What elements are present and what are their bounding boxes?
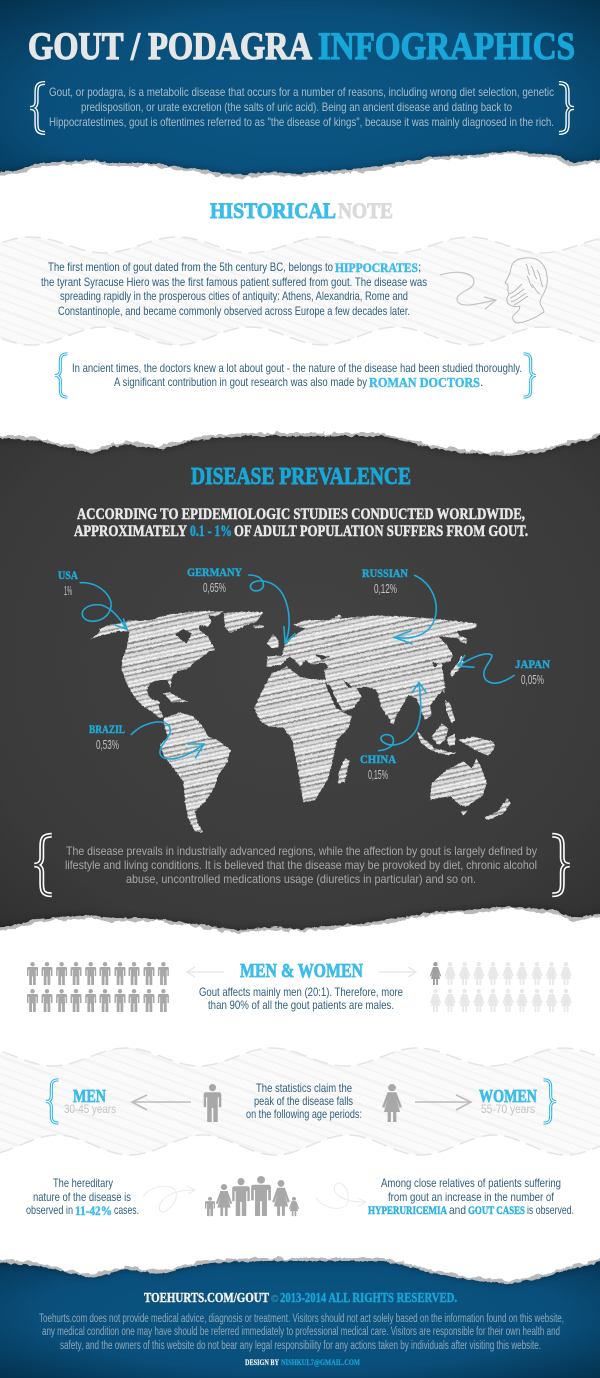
- age text: on the following age periods:: [246, 1107, 362, 1121]
- men and women text: [199, 985, 403, 1012]
- heredity left text: observed in: [26, 1203, 73, 1217]
- history text: the tyrant Syracuse Hiero was the first famous patient suffered from gout. The disease was: [41, 275, 427, 289]
- age text: The statistics claim the: [256, 1081, 352, 1095]
- history text: ;: [418, 260, 421, 274]
- disclaimer text: [39, 1313, 564, 1352]
- icon: Hippocrates bust: [505, 258, 547, 323]
- age text: peak of the disease falls: [254, 1094, 353, 1108]
- panel: hatched history band: [0, 237, 600, 345]
- torn paper: upper white sheet: [0, 154, 600, 453]
- arrow: left to men: [132, 1095, 191, 1110]
- heredity right text: from gout an increase in the number of: [388, 1190, 555, 1204]
- panel: men and women: [27, 960, 572, 1012]
- heredity left text: nature of the disease is: [33, 1190, 131, 1204]
- icon: woman: [382, 1084, 402, 1122]
- arrow: toward women: [379, 967, 416, 977]
- history text: spreading rapidly in the prosperous cities of antiquity: Athens, Alexandria, Rome and: [60, 289, 408, 303]
- panel background: chalkboard: [0, 425, 600, 940]
- heredity left text: 11-42%: [75, 1204, 112, 1218]
- subheading: 0.1 - 1%: [190, 523, 232, 540]
- panel: footer: [39, 1291, 564, 1367]
- title: GOUT / PODAGRA: [28, 25, 312, 68]
- heredity right text: [368, 1176, 574, 1217]
- map label: China: [360, 752, 396, 782]
- map label: USA: USA: [58, 568, 78, 582]
- arrow: to Hippocrates: [440, 272, 496, 309]
- panel background: blue footer: [0, 1250, 600, 1378]
- grandmother: [216, 1184, 232, 1216]
- grandfather: [232, 1178, 250, 1216]
- callout text: ROMAN DOCTORS: [369, 376, 480, 391]
- torn paper: lower white sheet: [0, 909, 600, 1281]
- mother: [272, 1180, 290, 1216]
- heredity left text: The hereditary: [53, 1176, 113, 1190]
- map label: Russian: [362, 566, 408, 596]
- panel: header: [28, 25, 575, 133]
- label: men age: [64, 1086, 116, 1116]
- intro text: [49, 85, 554, 129]
- label: men age: MEN: [73, 1086, 106, 1106]
- arrow: right to women: [415, 1095, 471, 1110]
- intro text: predisposition, or urate excretion (the salts of uric acid). Being an ancient disease and dating back to: [81, 100, 512, 114]
- prevalence text: lifestyle and living conditions. It is believed that the disease may be provoked by diet, chronic alcohol: [65, 858, 537, 872]
- heading: men and women: MEN & WOMEN: [240, 960, 363, 982]
- child right: [289, 1197, 299, 1216]
- history text: [41, 260, 427, 318]
- map label: China: 0,15%: [368, 767, 388, 782]
- map label: Germany: 0,65%: [203, 580, 226, 595]
- icon: blue left brace: [55, 354, 68, 397]
- icon: right brace: [559, 83, 574, 133]
- callout: ancient times: [55, 354, 536, 397]
- subheading: OF ADULT POPULATION SUFFERS FROM GOUT.: [234, 523, 528, 540]
- child left: [205, 1197, 215, 1216]
- callout text: .: [480, 375, 483, 389]
- icon: chalk right brace: [552, 835, 570, 895]
- icon: blue right brace: [544, 1080, 556, 1123]
- map label: Brazil: [89, 722, 125, 752]
- label: women age: 55-70 years: [481, 1102, 535, 1116]
- history text: HIPPOCRATES: [335, 260, 418, 275]
- prevalence text: [65, 844, 537, 886]
- hatched wavy ribbon: [0, 1048, 600, 1155]
- prevalence text: The disease prevails in industrially advanced regions, while the affection by gout is largely defined by: [66, 844, 537, 858]
- heredity right text: and: [449, 1203, 466, 1217]
- label: women age: [479, 1086, 537, 1116]
- label: men age: 30-45 years: [64, 1102, 116, 1116]
- subheading: APPROXIMATELY: [74, 523, 187, 540]
- title: [28, 25, 575, 68]
- design credit: DESIGN BY: [245, 1358, 279, 1367]
- icon: family: [205, 1176, 299, 1216]
- men and women text: than 90% of all the gout patients are males.: [208, 998, 394, 1012]
- father: [251, 1176, 271, 1216]
- design credit: [245, 1358, 360, 1367]
- heredity right text: is observed.: [527, 1203, 574, 1217]
- age text: [246, 1081, 362, 1121]
- panel: heredity: [26, 1176, 574, 1218]
- callout text: A significant contribution in gout research was also made by: [114, 375, 367, 389]
- prevalence text: abuse, uncontrolled medications usage (diuretics in particular) and so on.: [126, 872, 476, 886]
- heredity left text: [26, 1176, 139, 1218]
- footer heading: [144, 1291, 457, 1306]
- heading: historical note: HISTORICAL: [210, 198, 336, 223]
- footer heading: TOEHURTS.COM/GOUT: [144, 1291, 270, 1306]
- icon group: women pictograms: [430, 962, 572, 1012]
- heading: disease prevalence: DISEASE PREVALENCE: [191, 464, 411, 490]
- arrow: faint left: [143, 1186, 195, 1212]
- map label: Germany: GERMANY: [187, 565, 242, 579]
- subheading: [74, 506, 528, 540]
- heading: historical note: NOTE: [338, 198, 393, 223]
- icon: chalk left brace: [34, 835, 52, 895]
- icon group: men pictograms: [27, 962, 169, 1012]
- men and women text: Gout affects mainly men (20:1). Therefore, more: [199, 985, 403, 999]
- map label: Japan: [515, 657, 550, 687]
- icon: blue left brace: [46, 1080, 58, 1123]
- label: women age: WOMEN: [479, 1086, 537, 1106]
- map label: China: CHINA: [360, 752, 396, 766]
- map label: Brazil: BRAZIL: [89, 722, 125, 736]
- heredity left text: cases.: [114, 1203, 139, 1217]
- world map: [90, 611, 511, 832]
- heredity right text: GOUT CASES: [468, 1203, 525, 1217]
- history text: Constantinople, and became commonly observed across Europe a few decades later.: [58, 304, 410, 318]
- map label: USA: [58, 568, 78, 598]
- footer heading: ©: [271, 1294, 279, 1305]
- icon: left brace: [30, 83, 45, 133]
- design credit: NISHKUL7@GMAIL.COM: [281, 1358, 360, 1367]
- map label: Russian: RUSSIAN: [362, 566, 408, 580]
- callout text: [72, 361, 522, 391]
- map label: Japan: JAPAN: [515, 657, 550, 671]
- footer heading: 2013-2014 ALL RIGHTS RESERVED.: [280, 1291, 457, 1306]
- icon: man: [204, 1084, 221, 1122]
- map label: Russian: 0,12%: [374, 581, 397, 596]
- heredity right text: HYPERURICEMIA: [368, 1203, 447, 1217]
- map label: USA: 1%: [64, 583, 72, 598]
- heredity right text: Among close relatives of patients suffering: [381, 1176, 561, 1190]
- arrows: map callouts: [80, 575, 515, 759]
- map label: Brazil: 0,53%: [96, 737, 119, 752]
- arrow: faint right: [316, 1183, 366, 1208]
- map label: Japan: 0,05%: [521, 672, 544, 687]
- map label: Germany: [187, 565, 242, 595]
- panel background: blue header: [0, 0, 600, 215]
- arrow: toward men: [187, 967, 224, 977]
- panel: disease prevalence: [34, 464, 570, 895]
- panel: hatched age band: [0, 1048, 600, 1155]
- icon: blue right brace: [524, 354, 536, 397]
- hatched wavy ribbon: [0, 237, 600, 345]
- history text: The first mention of gout dated from the 5th century BC, belongs to: [48, 260, 333, 274]
